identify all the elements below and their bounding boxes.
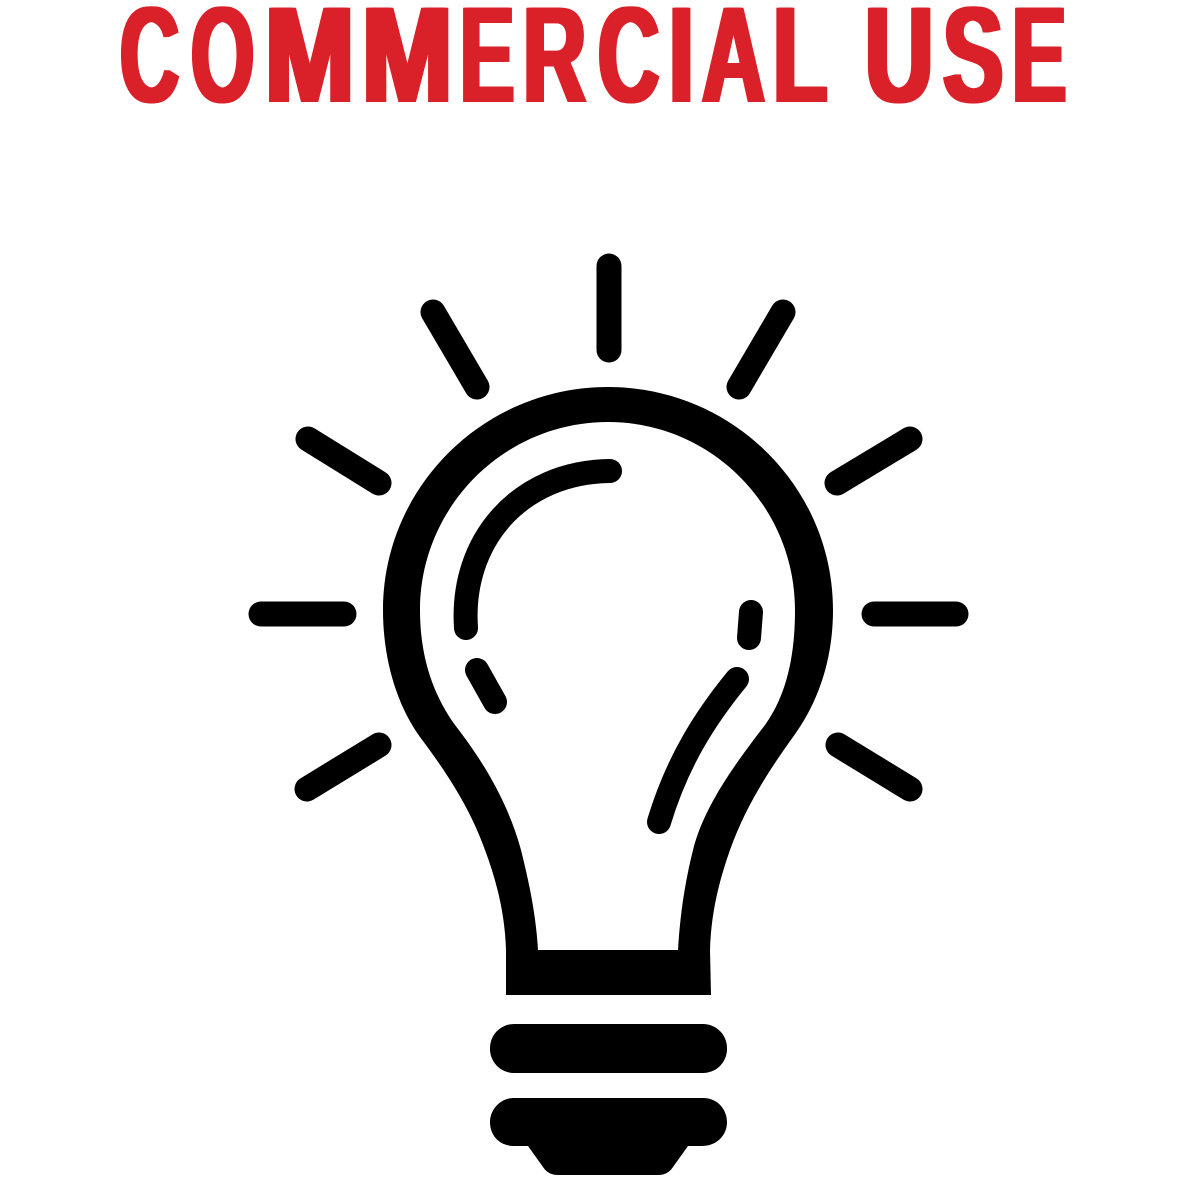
- screw base tip: [490, 1098, 727, 1175]
- highlights: [466, 471, 751, 822]
- rays: [261, 266, 956, 789]
- screw base ring: [490, 1024, 727, 1073]
- title: [120, 0, 1066, 132]
- bulb outline: [383, 387, 833, 995]
